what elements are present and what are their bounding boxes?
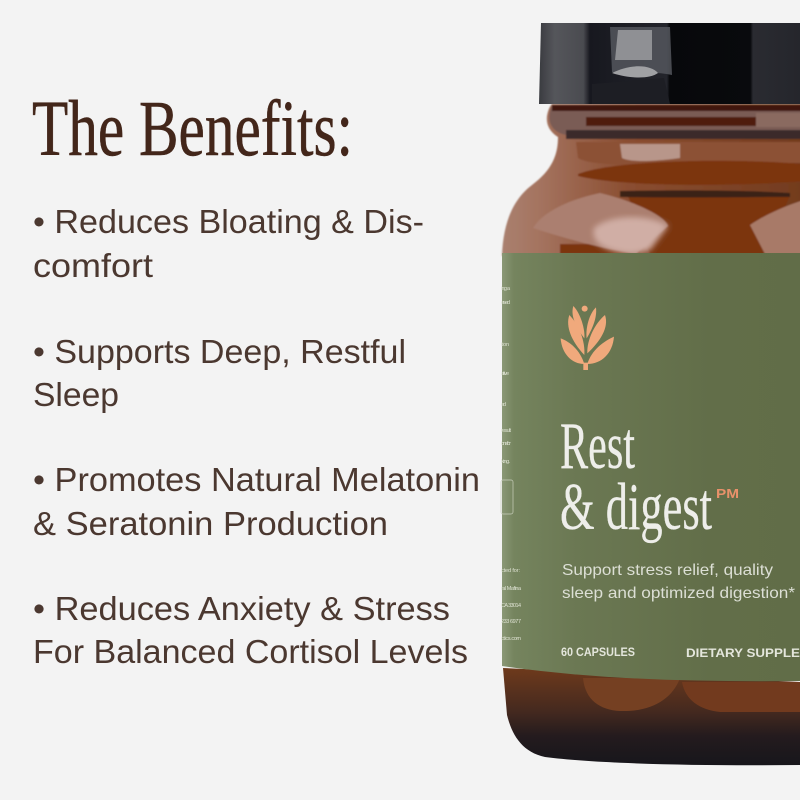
side text strip: ions for xyxy=(501,441,511,447)
supplement note: DIETARY SUPPLEM xyxy=(686,648,800,660)
product bottle xyxy=(501,23,800,765)
benefit: bloating: • Reduces Bloating & Dis- xyxy=(33,203,424,240)
benefit: sleep: • Supports Deep, Restful xyxy=(33,333,406,370)
neck ring xyxy=(549,105,800,135)
bottle cap xyxy=(539,23,800,104)
side text strip: ative xyxy=(501,371,509,377)
side text strip: 233 6977 xyxy=(501,619,521,625)
shoulder highlights xyxy=(576,142,800,164)
side text strip: king. xyxy=(501,459,510,465)
side text strip: ing a xyxy=(501,286,511,292)
product name second line: & digest xyxy=(560,470,712,544)
title: The Benefits: xyxy=(32,86,353,173)
label xyxy=(501,253,800,681)
benefits list xyxy=(33,203,480,670)
tagline: Support stress relief, quality xyxy=(562,562,773,579)
capsule count: 60 CAPSULES xyxy=(561,647,635,659)
bottle glass upper xyxy=(502,104,800,256)
benefit: anxiety continued: For Balanced Cortisol Levels xyxy=(33,633,468,670)
side text strip: tion xyxy=(501,342,509,348)
side text strip: ral Mafina xyxy=(501,586,522,592)
side text strip: CA 33014 xyxy=(501,603,521,609)
benefit: anxiety: • Reduces Anxiety & Stress xyxy=(33,590,450,627)
side text strip: cted for: xyxy=(501,568,520,574)
bottle base xyxy=(503,668,800,765)
icon: leaf logo xyxy=(561,306,614,370)
side text strip: erved xyxy=(501,300,510,306)
side text strip: result xyxy=(501,428,511,434)
benefit: melatonin continued: & Seratonin Production xyxy=(33,505,388,542)
capsules in base xyxy=(583,678,800,712)
product name: Rest xyxy=(560,409,635,483)
side text strip xyxy=(501,286,522,642)
PM mark: PM xyxy=(716,486,739,501)
benefit: sleep continued: Sleep xyxy=(33,376,119,413)
benefit: bloating continued: comfort xyxy=(33,247,153,284)
tagline second line: sleep and optimized digestion* xyxy=(562,585,795,602)
benefit: melatonin: • Promotes Natural Melatonin xyxy=(33,461,480,498)
side text strip: ctics.com xyxy=(501,636,521,642)
side text strip: ed xyxy=(501,402,506,408)
